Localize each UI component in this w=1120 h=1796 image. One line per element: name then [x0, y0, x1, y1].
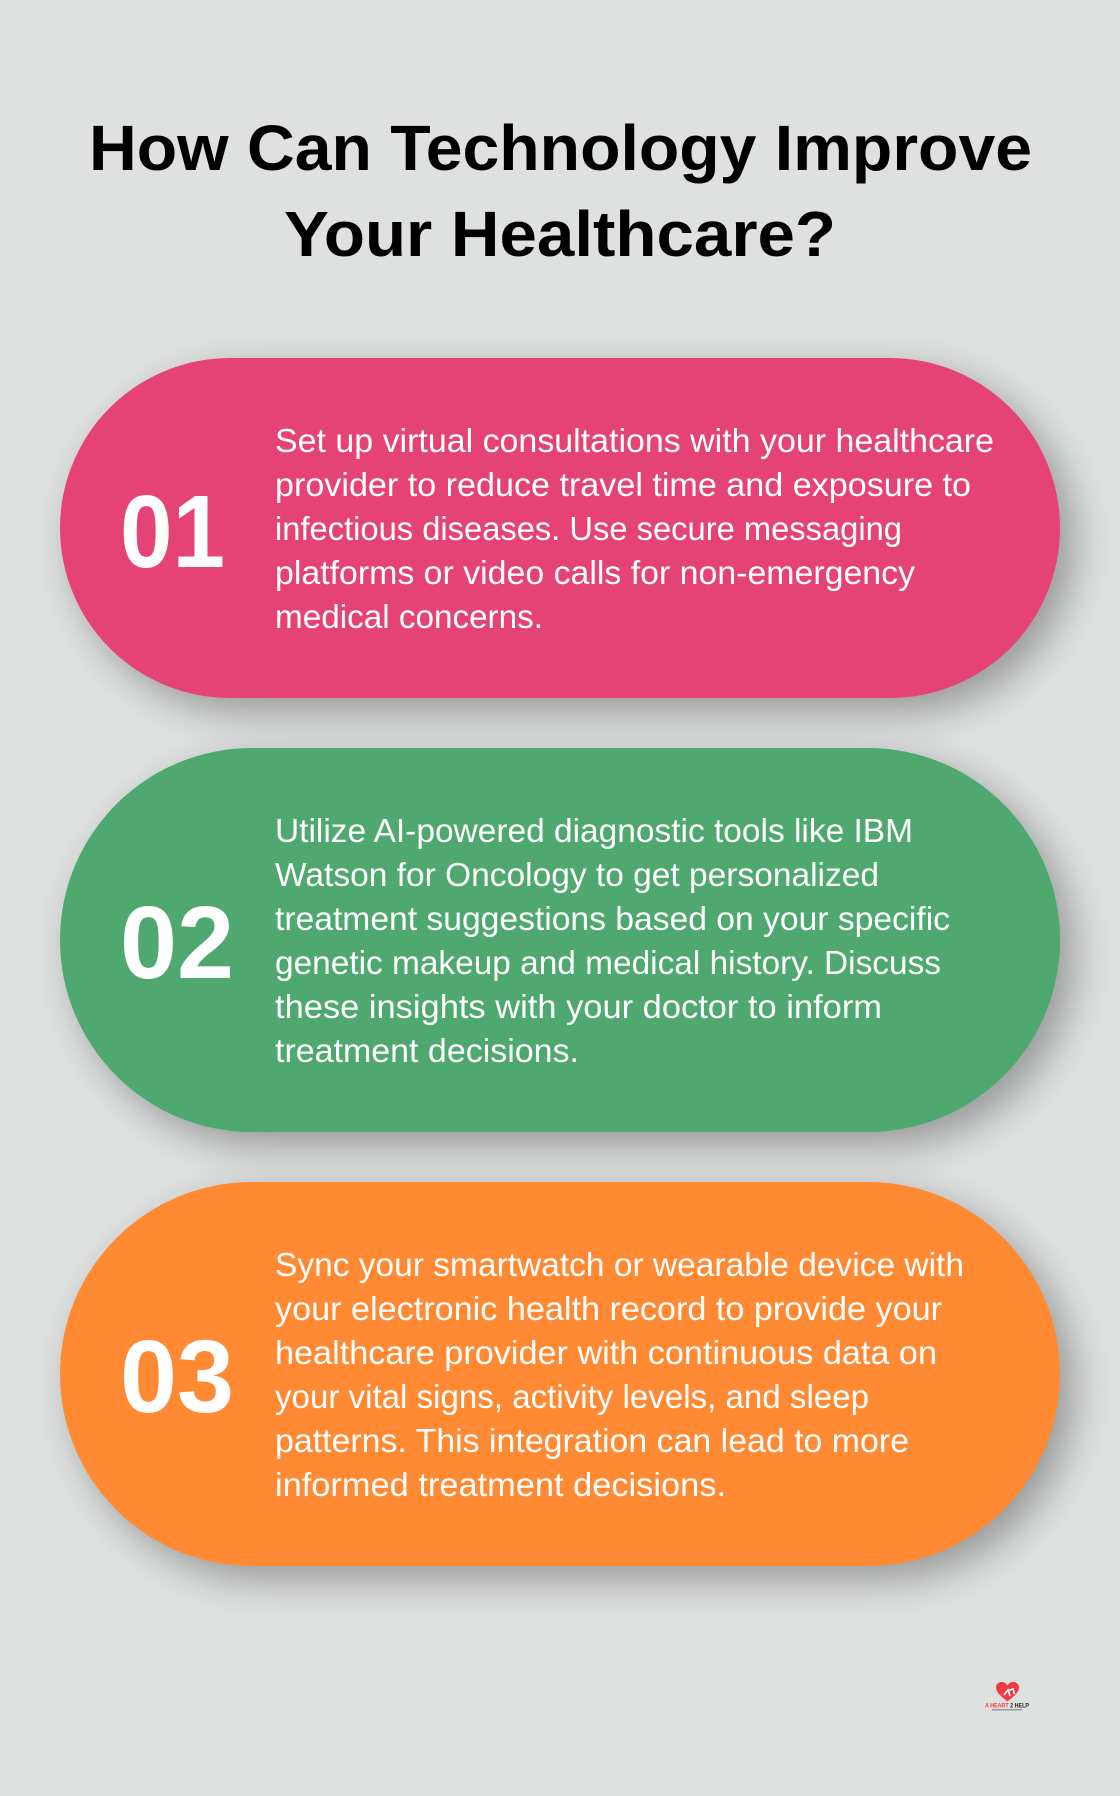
logo: A Heart 2 Help [985, 1682, 1030, 1710]
text: step 02 [275, 812, 950, 1069]
text: step 02: Watson for Oncology to get personalized [275, 856, 879, 893]
text: step 01: platforms or video calls for non-emergency [275, 554, 916, 591]
text: step 03: Sync your smartwatch or wearable device with [275, 1246, 964, 1283]
text: step 03: healthcare provider with continuous data on [275, 1334, 937, 1371]
icon: heart with hands [996, 1682, 1019, 1702]
panel: step 01 [60, 358, 1074, 712]
text: step 01: Set up virtual consultations with your healthcare [275, 422, 994, 459]
title [89, 112, 1032, 270]
text: step 02: genetic makeup and medical history. Discuss [275, 944, 941, 981]
title: Your Healthcare? [284, 198, 836, 270]
text: step 02: treatment suggestions based on your specific [275, 900, 950, 937]
text: step 01 [275, 422, 994, 635]
number 02: 02 [120, 885, 234, 1000]
logo tagline strip (illegible in reference) [992, 1709, 1022, 1710]
text: step 02: treatment decisions. [275, 1032, 579, 1069]
text: step 03: your electronic health record to provide your [275, 1290, 942, 1327]
panel: step 02 [60, 748, 1074, 1146]
number 03: 03 [120, 1319, 234, 1434]
panel: step 03 [60, 1182, 1074, 1580]
text: step 01: medical concerns. [275, 598, 543, 635]
text: step 03: patterns. This integration can lead to more [275, 1422, 909, 1459]
logo wordmark: A HEART 2 HELP [985, 1702, 1030, 1710]
text: step 03: your vital signs, activity levels, and sleep [275, 1378, 869, 1415]
text: step 03: informed treatment decisions. [275, 1466, 726, 1503]
text: step 03 [275, 1246, 964, 1503]
text: step 01: infectious diseases. Use secure messaging [275, 510, 902, 547]
text: step 02: Utilize AI-powered diagnostic tools like IBM [275, 812, 913, 849]
text: step 01: provider to reduce travel time and exposure to [275, 466, 971, 503]
number 01: 01 [120, 474, 225, 589]
text: step 02: these insights with your doctor to inform [275, 988, 882, 1025]
title: How Can Technology Improve [89, 112, 1032, 184]
